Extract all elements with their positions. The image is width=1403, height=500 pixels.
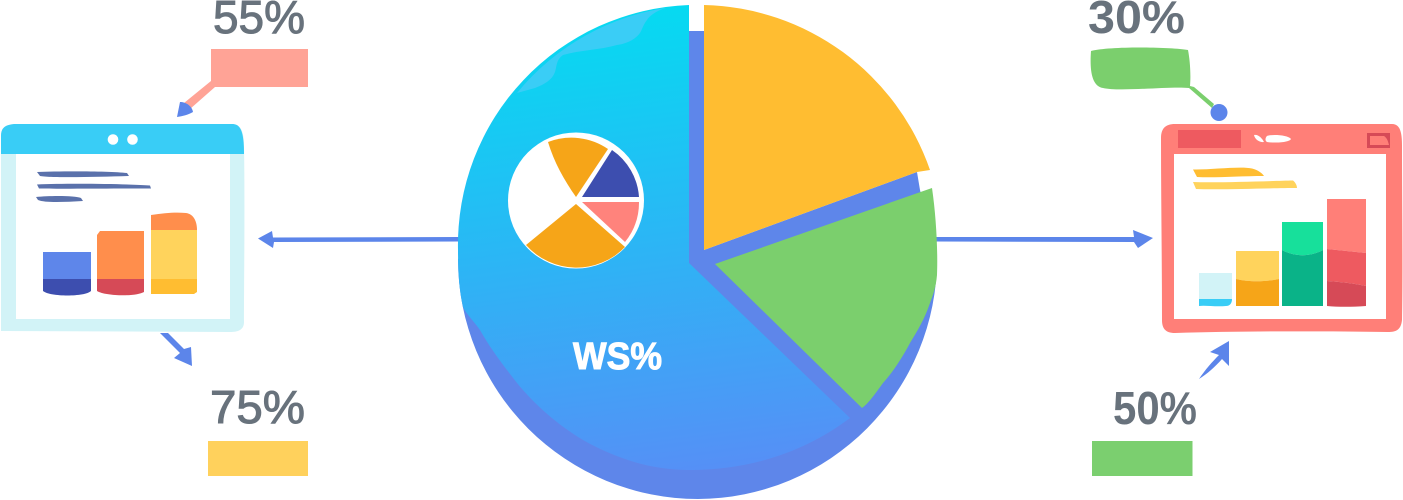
slice highlight: [517, 7, 672, 93]
mini slice: pink: [582, 202, 639, 242]
bar: red: [1327, 199, 1366, 307]
slice: green: [715, 188, 937, 408]
white pills: [1254, 135, 1291, 143]
red tab: [1178, 130, 1241, 148]
text lines: [1193, 168, 1264, 177]
callout: 50%: 50%: [1113, 382, 1197, 434]
pie label: WS%: [573, 336, 662, 378]
text lines: [36, 171, 151, 202]
left browser window: [1, 124, 244, 332]
window title bar: [1, 124, 244, 154]
window dots: [108, 134, 138, 145]
salmon label box: [184, 49, 308, 109]
arrow: 50% to right window: [1199, 341, 1229, 379]
blue dot: [1210, 104, 1228, 121]
mini pie chart: [508, 132, 644, 268]
pie chart: [458, 5, 937, 499]
window control icon: [1367, 133, 1390, 148]
arrow: pie to right window: [935, 230, 1153, 248]
arrow: pie to left window: [258, 231, 460, 248]
bar: orange: [97, 231, 144, 295]
bar: light: [1199, 273, 1232, 306]
bar: green: [1282, 222, 1323, 306]
yellow label box: [208, 441, 308, 476]
bar: yellow: [1236, 251, 1279, 306]
slice: blue main: [458, 5, 850, 470]
arrow: left window to 75%: [160, 333, 192, 366]
callout: 75%: 75%: [210, 381, 305, 433]
bar: yellow: [151, 213, 197, 294]
right browser window: [1161, 124, 1402, 333]
green label box: [1091, 48, 1214, 108]
pie shadow base: [458, 31, 937, 499]
blue pointer: [177, 102, 193, 117]
callout: 55%: [177, 0, 308, 117]
mini slice: orange bottom: [526, 204, 625, 268]
mini slice: navy: [582, 150, 639, 197]
callout: 75%: [208, 381, 308, 476]
callout: 30%: [1088, 0, 1228, 121]
mini slice: orange top: [548, 138, 608, 197]
window content area: [1174, 154, 1386, 319]
bar: blue: [43, 252, 91, 296]
callout: 50%: [1092, 382, 1197, 476]
green label box: [1092, 441, 1192, 476]
window content area: [16, 154, 230, 319]
slice: yellow: [704, 5, 930, 250]
